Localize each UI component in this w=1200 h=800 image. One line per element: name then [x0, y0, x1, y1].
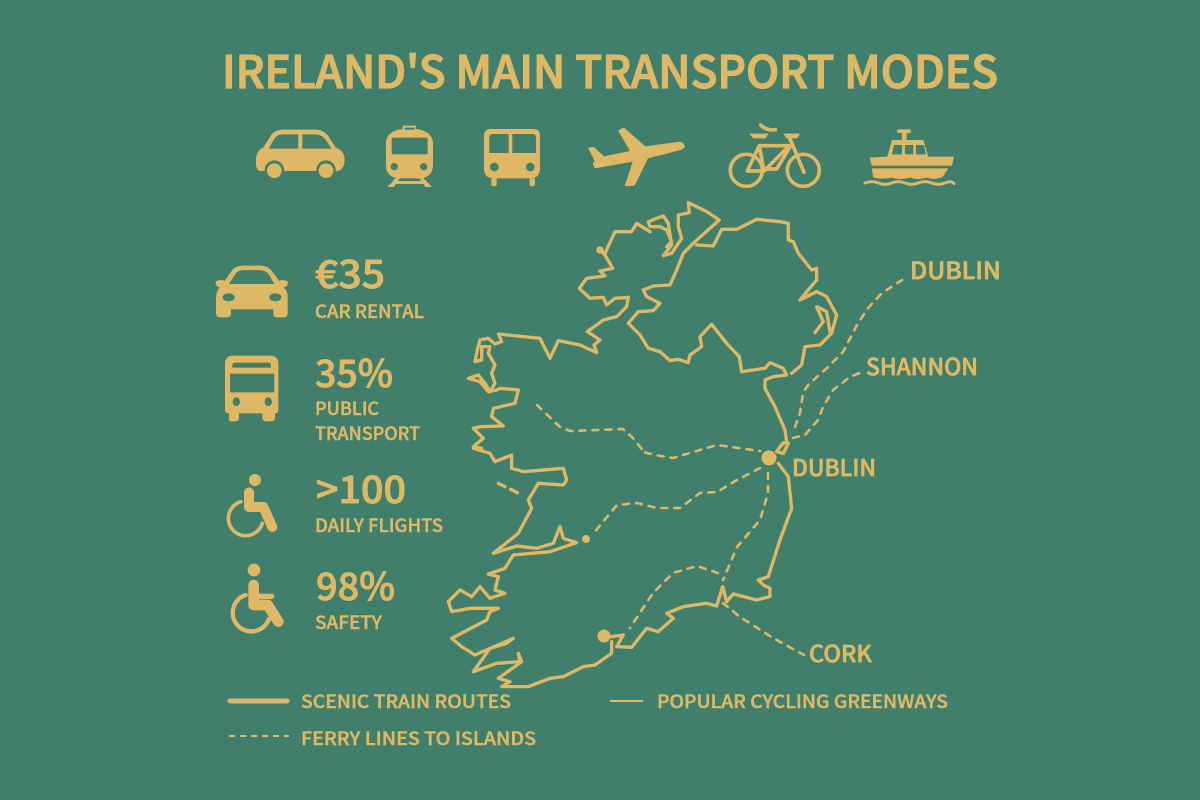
- stat: daily flights: DAILY FLIGHTS: [315, 512, 443, 538]
- label: Dublin north: DUBLIN: [910, 251, 1001, 286]
- label: Cork: CORK: [809, 635, 873, 669]
- icon: wheelchair small: [228, 474, 272, 536]
- stat: daily flights: [315, 459, 443, 538]
- map of Ireland: [448, 203, 1001, 687]
- legend: [229, 688, 948, 751]
- icon: train: [386, 126, 433, 187]
- legend: cycling greenways: POPULAR CYCLING GREENWAYS: [657, 688, 948, 714]
- icon: bus: [484, 129, 540, 186]
- label: Shannon: SHANNON: [866, 348, 978, 382]
- icon: public bus: [225, 356, 278, 421]
- transport mode icon row: [256, 125, 954, 187]
- stat: daily flights: >100: [316, 459, 406, 514]
- stat: safety: 98%: [316, 556, 395, 611]
- stat: car rental: [315, 244, 424, 324]
- icon: airplane: [588, 128, 685, 186]
- stat: safety: [315, 556, 395, 635]
- legend: scenic train routes: SCENIC TRAIN ROUTES: [301, 688, 511, 714]
- dashed routes: [537, 280, 902, 655]
- stat: public transport: TRANSPORT: [315, 420, 420, 446]
- icon: wheelchair large: [233, 564, 278, 631]
- stat: safety: SAFETY: [315, 609, 382, 635]
- map outline: north and west: [468, 203, 837, 448]
- stat: car rental: €35: [315, 244, 385, 299]
- icon: bicycle: [730, 125, 819, 186]
- stat: car rental: CAR RENTAL: [315, 298, 424, 324]
- stat: public transport: [315, 343, 420, 446]
- stat: public transport: PUBLIC: [315, 395, 379, 421]
- legend: ferry lines: FERRY LINES TO ISLANDS: [301, 725, 536, 751]
- label: Dublin: DUBLIN: [792, 449, 876, 483]
- city markers: [582, 450, 776, 642]
- stat: public transport: 35%: [315, 343, 393, 398]
- panel: key statistics: [216, 244, 443, 635]
- map outline: south and east: [448, 443, 792, 687]
- icon: rental car: [216, 266, 288, 317]
- icon: car: [256, 130, 345, 180]
- title: IRELAND'S MAIN TRANSPORT MODES: [222, 36, 998, 101]
- icon: ferry: [865, 129, 954, 184]
